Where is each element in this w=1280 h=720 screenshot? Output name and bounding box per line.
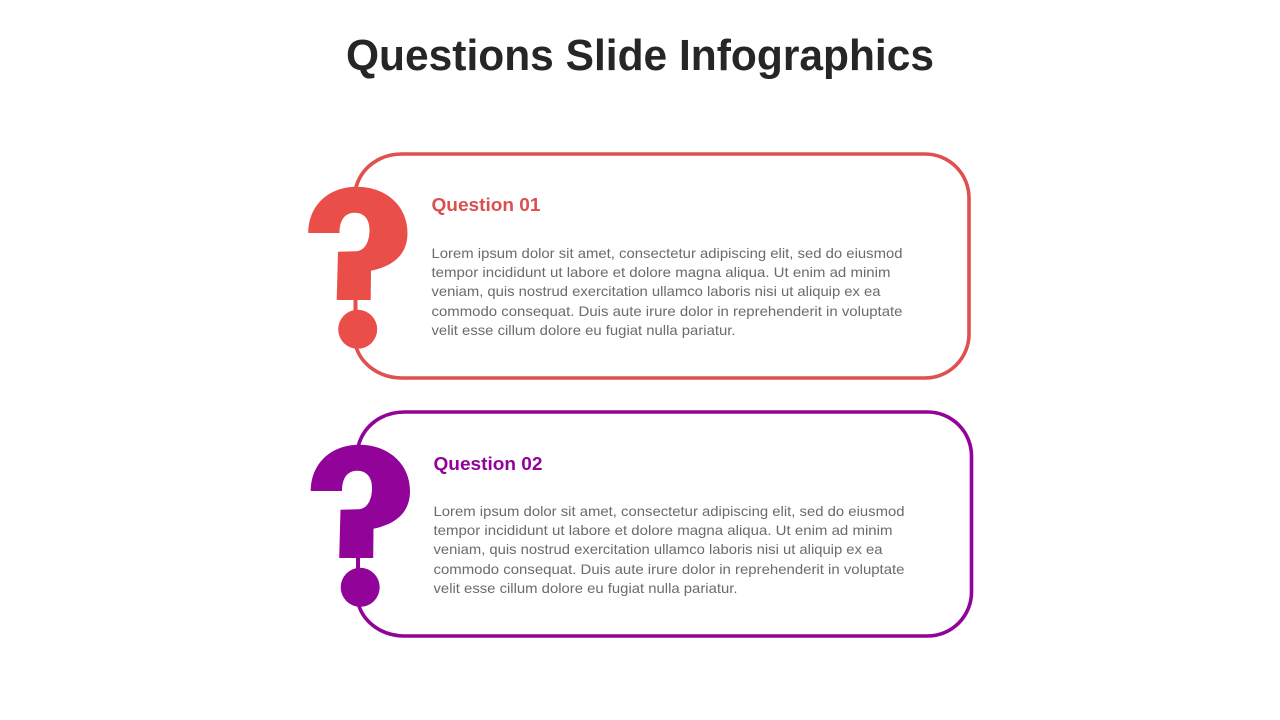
text block: question 01 body: Lorem ipsum dolor sit amet, consectetur adipiscing elit, sed do eiusmod [432, 245, 902, 261]
panel: question 02 [311, 412, 972, 636]
text block: question 01 body: veniam, quis nostrud exercitation ullamco laboris nisi ut aliquip ex ea [432, 283, 881, 299]
text block: question 02 body: tempor incididunt ut labore et dolore magna aliqua. Ut enim ad minim [434, 522, 892, 538]
title: Questions Slide Infographics [346, 31, 934, 80]
card outline 02 [358, 412, 972, 636]
text block: question 01 body: velit esse cillum dolore eu fugiat nulla pariatur. [432, 322, 736, 338]
text block: question 02 body: commodo consequat. Duis aute irure dolor in reprehenderit in voluptate [434, 561, 905, 577]
text block: question 01 body [432, 245, 903, 338]
text block: question 02 body: veniam, quis nostrud exercitation ullamco laboris nisi ut aliquip ex ea [434, 541, 883, 557]
text block: question 02 body [434, 503, 905, 596]
heading: question 02: Question 02 [434, 454, 542, 474]
text block: question 01 body: tempor incididunt ut labore et dolore magna aliqua. Ut enim ad minim [432, 264, 890, 280]
heading: question 01: Question 01 [432, 195, 540, 215]
icon: red question mark [308, 187, 408, 349]
card outline 01 [356, 154, 969, 378]
icon: purple question mark [311, 445, 410, 607]
text block: question 01 body: commodo consequat. Duis aute irure dolor in reprehenderit in voluptate [432, 303, 903, 319]
text block: question 02 body: velit esse cillum dolore eu fugiat nulla pariatur. [434, 580, 738, 596]
text block: question 02 body: Lorem ipsum dolor sit amet, consectetur adipiscing elit, sed do eiusmod [434, 503, 904, 519]
panel: question 01 [308, 154, 969, 378]
